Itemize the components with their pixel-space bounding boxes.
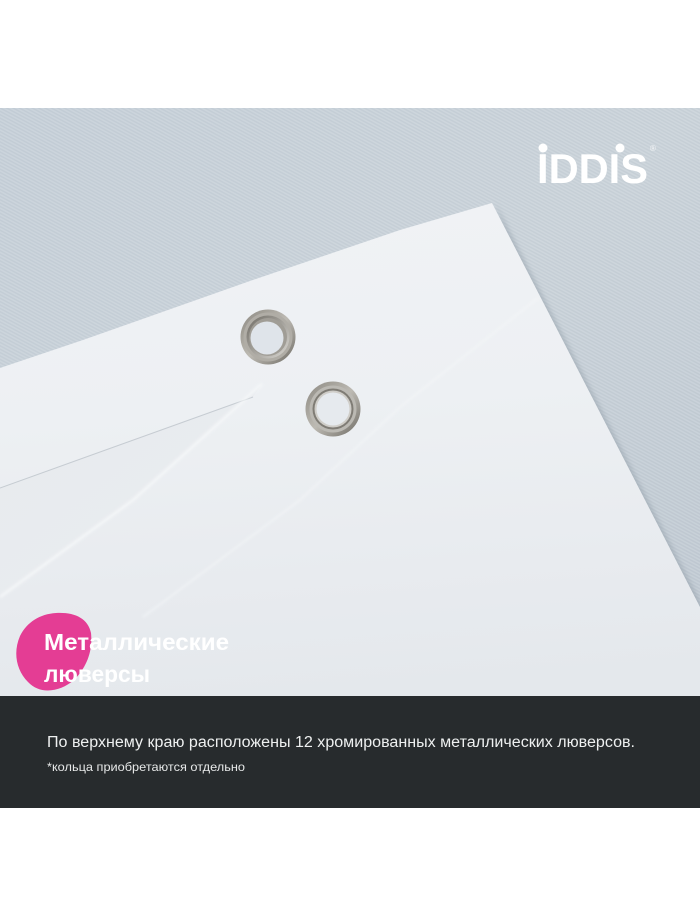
pink blob (16, 613, 91, 690)
gray background fabric (0, 108, 700, 606)
logo: IDDIS: ® (650, 144, 656, 153)
logo: IDDIS: IDDIS (537, 145, 648, 192)
heading (44, 629, 229, 687)
heading: люверсы (44, 661, 150, 687)
dark caption panel (0, 696, 700, 808)
seam line (143, 298, 538, 617)
curtain shadow (498, 211, 700, 606)
caption text: По верхнему краю расположены 12 хромированных металлических люверсов. (47, 734, 635, 751)
fold edge line (0, 397, 253, 488)
infographic canvas (0, 108, 700, 808)
icon: grommet upper (240, 310, 296, 364)
heading: Металлические (44, 629, 229, 655)
crease highlight (0, 384, 262, 597)
white curtain (0, 203, 700, 696)
footnote: *кольца приобретаются отдельно (47, 760, 245, 774)
icon: grommet lower (306, 382, 360, 436)
photo: fabric with grommets (0, 108, 700, 696)
lower pocket shade (0, 384, 262, 597)
